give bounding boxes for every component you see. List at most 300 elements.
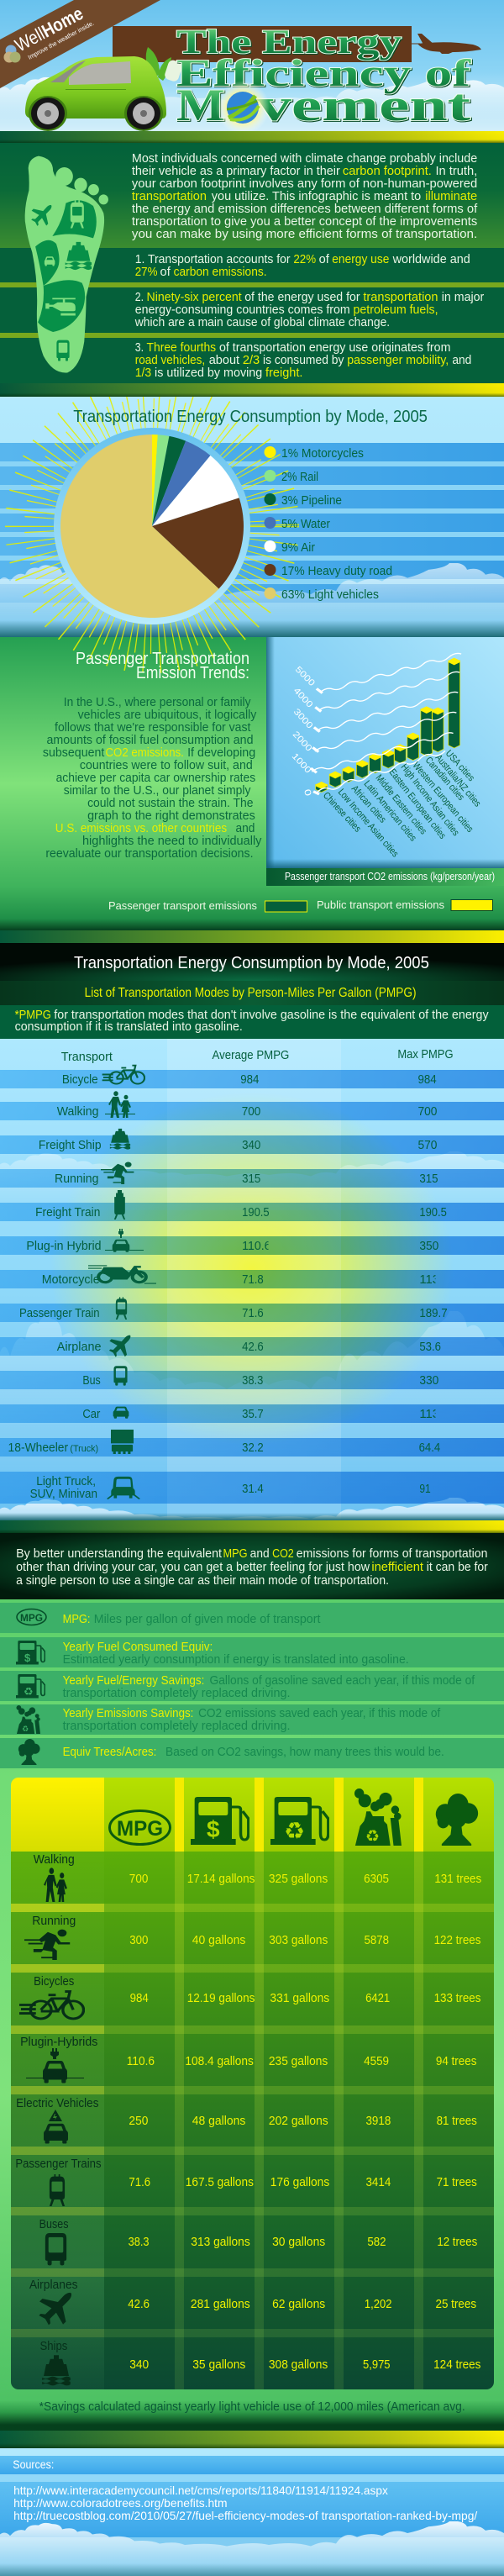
title: The Energy Efficiency of Movement: vement	[257, 80, 470, 130]
table row labels: Passenger Trains	[15, 2157, 102, 2171]
legend item: yearly fuel savings: Yearly Fuel/Energy Savings:	[63, 1674, 204, 1688]
legend item: equiv trees	[63, 1746, 444, 1759]
row: light truck SUV minivan: SUV, Minivan	[30, 1488, 97, 1501]
text block: emission trends paragraph: follows that we're responsible for vast	[55, 721, 250, 735]
text block: intro paragraph	[132, 152, 479, 241]
illustration: footprint with transport icons	[25, 156, 108, 372]
table row labels: Airplanes	[29, 2278, 78, 2292]
text block: emission trends paragraph: vehicles are ubiquitous, it logically	[78, 709, 257, 722]
values: electric vehicles: 81 trees	[437, 2115, 477, 2128]
text block: intro paragraph: your carbon footprint involves any form of non-human-powered	[132, 177, 477, 191]
text block: fact 1: carbon emissions.	[174, 266, 267, 279]
values: bicycles: 133 trees	[434, 1992, 481, 2005]
text block: fact 3: is utilized by moving	[155, 366, 262, 380]
legend item: yearly emissions savings	[63, 1707, 441, 1733]
panel: lower green background	[0, 1599, 504, 2425]
title brown backing bar	[113, 26, 412, 62]
values: running: 5878	[365, 1934, 389, 1947]
row: motorcycle	[42, 1274, 435, 1286]
row: freight train	[35, 1206, 447, 1220]
values: running	[129, 1934, 481, 1947]
values: passenger trains: 167.5 gallons	[186, 2176, 255, 2189]
values: plugin hybrids	[127, 2055, 477, 2068]
legend item: yearly fuel savings: transportation completely replaced driving.	[63, 1687, 291, 1700]
chart city labels: USA cities	[444, 749, 476, 783]
text block: fact 2: 2.	[135, 291, 144, 304]
row: 18-wheeler: (Truck)	[70, 1442, 98, 1454]
values: walking: 131 trees	[434, 1873, 482, 1886]
values: plugin hybrids: 110.6	[127, 2055, 155, 2068]
text block: sources: Sources:	[13, 2458, 54, 2472]
icon: MPG badge: MPG	[117, 1817, 163, 1841]
values: ships: 124 trees	[433, 2358, 481, 2372]
text block: fact 1: 1. Transportation accounts for	[135, 253, 291, 266]
table row labels: Bicycles	[34, 1975, 75, 1989]
values: ships: 35 gallons	[192, 2358, 246, 2372]
text block: fact 3: passenger mobility,	[347, 354, 449, 367]
heading: consumption table title: Transportation Energy Consumption by Mode, 2005	[74, 954, 429, 972]
legend: pie chart modes: 3% Pipeline	[281, 494, 342, 508]
values: bicycles: 331 gallons	[270, 1992, 330, 2005]
row: airplane: 42.6	[242, 1341, 264, 1354]
row: bicycle: 984	[240, 1073, 259, 1087]
text block: fact 1: 27%	[135, 266, 158, 279]
row: passenger train	[19, 1307, 448, 1320]
chart city labels: Eastern European cities	[386, 767, 448, 841]
heading: passenger transportation emission trends: Emission Trends:	[136, 664, 249, 682]
values: bicycles	[130, 1992, 481, 2005]
legend item: yearly fuel consumed	[63, 1641, 409, 1667]
values: airplanes	[128, 2298, 477, 2311]
row: bus	[82, 1374, 438, 1388]
text block: emission trends paragraph: amounts of fossil fuel consumption and	[46, 734, 254, 747]
band: divider above dark section	[0, 930, 504, 943]
section: header sky	[0, 0, 504, 134]
text block: emission trends paragraph: similar to the U.S., our planet simply	[64, 784, 251, 798]
icon: tree	[436, 1794, 478, 1846]
row: freight ship: 570	[417, 1139, 437, 1152]
row: walking	[57, 1105, 437, 1119]
table row labels: Electric Vehicles	[16, 2097, 99, 2110]
text block: fact 3: 1/3	[135, 366, 151, 380]
icon: fuel pump dollar small: $	[24, 1651, 31, 1664]
row: light truck SUV minivan	[30, 1475, 431, 1501]
text block: explanation paragraph: other than driving your car, you can get a better feeling for just how	[16, 1561, 370, 1574]
panel: dark explanation block	[0, 1533, 504, 1599]
chart city labels: Canadian cities	[423, 756, 466, 803]
row: motorcycle: 71.8	[242, 1273, 264, 1287]
text block: sources: http://www.coloradotrees.org/benefits.htm	[13, 2497, 228, 2510]
table header row	[61, 1048, 454, 1064]
text block: emission trends paragraph: achieve per capita car ownership rates	[56, 772, 256, 785]
chart axis labels: 0	[302, 788, 313, 798]
row: running: 315	[242, 1172, 260, 1186]
legend item: yearly emissions savings: Yearly Emissions Savings:	[63, 1707, 193, 1720]
legend: pie chart modes: 17% Heavy duty road	[281, 565, 392, 578]
text block: sources	[13, 2458, 477, 2523]
legend: pie chart modes: 9% Air	[281, 541, 315, 555]
row: bicycle: Bicycle	[62, 1073, 98, 1087]
row: light truck SUV minivan: 31.4	[242, 1483, 264, 1496]
values: electric vehicles: 3918	[365, 2115, 391, 2128]
text block: emission trends paragraph: If developing	[187, 746, 255, 760]
legend item: equiv trees: Based on CO2 savings, how many trees this would be.	[165, 1746, 444, 1759]
text block: intro paragraph: carbon footprint.	[343, 165, 432, 178]
text block: intro paragraph: Most individuals concerned with climate change probably include	[132, 152, 477, 166]
panel: consumption table heading	[0, 943, 504, 1039]
row: car: 35.7	[242, 1408, 264, 1421]
values: running: 303 gallons	[269, 1934, 328, 1947]
row: car: Car	[82, 1408, 101, 1421]
text block: fact 1	[135, 253, 470, 279]
text block: emission trends paragraph	[43, 696, 262, 861]
values: buses	[129, 2236, 478, 2249]
text block: intro paragraph: In truth,	[435, 165, 477, 178]
values: electric vehicles: 250	[129, 2115, 148, 2128]
text block: fact 3: of transportation energy use originates from	[219, 341, 450, 355]
text block: intro paragraph: you can make by using more efficient forms of transportation.	[132, 228, 477, 241]
table header row: Average PMPG	[213, 1049, 289, 1062]
values: buses: 38.3	[129, 2236, 150, 2249]
legend: pie chart modes	[264, 446, 392, 602]
heading: pie chart title: Transportation Energy Consumption by Mode, 2005	[73, 408, 428, 426]
values: ships	[129, 2358, 481, 2372]
text block: fact 2: which are a main cause of global climate change.	[134, 316, 390, 329]
text block: fact 2: of the energy used for	[244, 291, 360, 304]
text block: emission trends paragraph: subsequent	[43, 746, 104, 760]
text block: intro paragraph: illuminate	[425, 190, 477, 203]
text block: PMPG note: for transportation modes that don't involve gasoline is the equivalent of the energy	[54, 1009, 489, 1022]
text block: fact 3: road vehicles,	[135, 354, 205, 367]
icon: fuel pump dollar	[191, 1797, 249, 1845]
row: plug-in hybrid	[26, 1240, 438, 1253]
chart city labels: Chinese cities	[321, 791, 363, 835]
chart city labels: African cities	[349, 784, 388, 825]
panel: passenger transportation green background	[0, 637, 504, 930]
heading: passenger transportation emission trends	[76, 650, 249, 682]
text block: fact 3: and	[452, 354, 471, 367]
chart legend: Passenger transport emissions	[108, 899, 257, 912]
subheading: list of modes: List of Transportation Modes by Person-Miles Per Gallon (PMPG)	[85, 986, 417, 1000]
legend item: yearly fuel savings	[63, 1674, 475, 1700]
values: airplanes: 281 gallons	[191, 2298, 250, 2311]
values: walking	[129, 1873, 482, 1886]
banner: WellHome logo strap: Improve the weather inside.	[27, 19, 95, 61]
row: running: 315	[419, 1172, 438, 1186]
text block: fact 3: 3.	[135, 341, 144, 355]
chart city labels: Western European cities	[411, 761, 475, 835]
row: plug-in hybrid: Plug-in Hybrid	[26, 1240, 102, 1253]
values: plugin hybrids: 235 gallons	[269, 2055, 328, 2068]
text block: PMPG note: *PMPG	[15, 1009, 51, 1022]
row: passenger train: 189.7	[419, 1307, 448, 1320]
title: The Energy Efficiency of Movement	[176, 23, 471, 130]
values: airplanes: 42.6	[128, 2298, 150, 2311]
band: divider above legend	[0, 1520, 504, 1533]
text block: explanation paragraph: emissions for forms of transportation	[297, 1547, 487, 1561]
legend item: MPG: Miles per gallon of given mode of transport	[94, 1613, 321, 1626]
row: freight ship	[39, 1139, 437, 1152]
legend icons	[16, 1609, 46, 1765]
text block: fact 2: energy-consuming countries comes from	[135, 303, 350, 317]
row: freight ship: Freight Ship	[39, 1139, 102, 1152]
values: walking: 700	[129, 1873, 148, 1886]
text block: sources: http://www.interacademycouncil.net/cms/reports/11840/11914/11924.aspx	[13, 2484, 389, 2498]
text block: emission trends paragraph: U.S. emissions vs. other countries	[55, 822, 228, 835]
text block: emission trends paragraph: countries were to follow suit, and	[80, 759, 253, 772]
row: passenger train: Passenger Train	[19, 1307, 100, 1320]
values: airplanes: 62 gallons	[272, 2298, 326, 2311]
legend item: yearly emissions savings: transportation completely replaced driving.	[63, 1720, 291, 1733]
icon: tree small	[18, 1739, 40, 1765]
text block: intro paragraph: the energy and emission differences between different forms of	[132, 203, 479, 216]
row: bicycle	[62, 1073, 437, 1087]
text block: emission trends paragraph: highlights the need to individually	[82, 835, 262, 848]
legend item: yearly emissions savings: CO2 emissions saved each year, if this mode of	[198, 1707, 441, 1720]
text block: emission trends paragraph: In the U.S., where personal or family	[64, 696, 251, 709]
values: walking: 17.14 gallons	[187, 1873, 255, 1886]
chart legend: Public transport emissions	[317, 898, 444, 911]
values: bicycles: 984	[130, 1992, 149, 2005]
values: passenger trains	[129, 2176, 477, 2189]
row: plug-in hybrid: 350	[419, 1240, 438, 1253]
table header row: Transport	[61, 1051, 113, 1064]
text block: fact 3: 2/3	[243, 354, 260, 367]
icon: globe with green swirl	[216, 81, 270, 134]
table values	[127, 1873, 482, 2372]
values: ships: 308 gallons	[269, 2358, 328, 2372]
text block: fact 2: Ninety-six percent	[146, 291, 242, 304]
values: buses: 12 trees	[437, 2236, 478, 2249]
footnote: savings calculation: *Savings calculated against yearly light vehicle use of 12,000 miles (American avg.	[39, 2400, 465, 2414]
text block: fact 3: freight.	[265, 366, 302, 380]
row: walking: Walking	[57, 1105, 98, 1119]
row: freight train: 190.5	[419, 1206, 447, 1220]
values: bicycles: 12.19 gallons	[187, 1992, 255, 2005]
icon: factory: ♻	[365, 1827, 380, 1846]
text block: emission trends paragraph: graph to the right demonstrates	[87, 809, 255, 823]
icons: PMPG table transport modes	[88, 1066, 156, 1499]
text block: fact 2: transportation	[363, 291, 438, 304]
row: plug-in hybrid: 110.6	[242, 1240, 271, 1253]
icon: factory small	[16, 1705, 40, 1734]
values: running: 300	[129, 1934, 148, 1947]
row: freight ship: 340	[242, 1139, 260, 1152]
table row labels: Running	[32, 1915, 76, 1928]
text block: fact 3: about	[209, 354, 239, 367]
values: plugin hybrids: 108.4 gallons	[185, 2055, 255, 2068]
chart legend	[108, 898, 492, 912]
row: running	[55, 1172, 438, 1186]
icon: fuel pump dollar: $	[207, 1816, 220, 1842]
chart axis labels: 5000	[293, 665, 317, 688]
text block: explanation paragraph: a single person to use a single car as their main mode of transportation.	[16, 1574, 389, 1588]
icon: MPG badge small: MPG	[20, 1612, 43, 1624]
table row labels: Plugin-Hybrids	[20, 2036, 98, 2049]
panel: pie chart background with stripes and clouds	[0, 397, 504, 637]
illustration: green car	[25, 47, 183, 131]
values: plugin hybrids: 4559	[364, 2055, 389, 2068]
values: electric vehicles: 202 gallons	[269, 2115, 328, 2128]
text block: intro paragraph: transportation	[132, 190, 207, 203]
table row icons	[19, 1867, 84, 2385]
text block: explanation paragraph: By better understanding the equivalent	[16, 1547, 222, 1561]
values: ships: 5,975	[363, 2358, 391, 2372]
text block: sources: http://truecostblog.com/2010/05/27/fuel-efficiency-modes-of transportation-ranked-by-mpg/	[13, 2510, 477, 2523]
table: savings comparison	[11, 1778, 494, 2389]
text block: PMPG note: consumption if it is translated into gasoline.	[15, 1020, 243, 1034]
legend: pie chart modes: 1% Motorcycles	[281, 447, 364, 461]
row: running: Running	[55, 1172, 98, 1186]
legend stripes	[0, 1603, 504, 1768]
chart city labels	[321, 749, 482, 859]
values: passenger trains: 71 trees	[437, 2176, 477, 2189]
text block: fact 1: worldwide and	[391, 253, 470, 266]
values: plugin hybrids: 94 trees	[436, 2055, 477, 2068]
values: passenger trains: 71.6	[129, 2176, 150, 2189]
text block: explanation paragraph: CO2	[272, 1547, 294, 1561]
values: buses: 582	[367, 2236, 386, 2249]
decoration: sun rays behind pie	[29, 403, 275, 649]
table row labels: Buses	[39, 2218, 69, 2231]
title: The Energy Efficiency of Movement: M	[176, 80, 225, 130]
row: bus: Bus	[82, 1374, 101, 1388]
icon: fuel pump recycle	[270, 1797, 328, 1845]
text block: explanation paragraph: MPG	[223, 1547, 248, 1561]
legend item: yearly fuel consumed: Yearly Fuel Consumed Equiv:	[63, 1641, 213, 1654]
values: electric vehicles: 48 gallons	[192, 2115, 246, 2128]
text block: fact 2: in major	[442, 291, 485, 304]
icon: MPG badge	[109, 1810, 170, 1844]
text block: fact 3	[135, 341, 471, 380]
title: The Energy Efficiency of Movement: The Energy	[176, 23, 402, 61]
text block: emission trends paragraph: and	[235, 822, 255, 835]
values: buses: 313 gallons	[191, 2236, 250, 2249]
text block: fact 3: Three fourths	[146, 341, 217, 355]
icon: fuel pump recycle: ♻	[284, 1817, 305, 1845]
chart city labels: Australia/NZ cities	[433, 753, 482, 809]
row: bus: 330	[419, 1374, 438, 1388]
banner: WellHome logo strap	[0, 0, 160, 88]
text block: fact 1: 22%	[293, 253, 316, 266]
panel: sources background	[0, 2448, 504, 2576]
text block: fact 1: of	[160, 266, 171, 279]
icon: fuel pump recycle small: ♻	[24, 1686, 34, 1699]
text block: intro paragraph: transportation to give you a better concept of the improvements	[132, 215, 478, 229]
values: airplanes: 1,202	[365, 2298, 391, 2311]
values: walking: 6305	[364, 1873, 389, 1886]
row: car: 113	[419, 1408, 439, 1421]
title: The Energy Efficiency of Movement: Efficiency of	[176, 51, 471, 94]
legend: pie chart modes: 5% Water	[281, 518, 330, 531]
icon: fuel pump recycle small	[16, 1674, 45, 1699]
values: buses: 30 gallons	[272, 2236, 326, 2249]
text block: intro paragraph: their vehicle as a primary factor in their	[132, 165, 340, 178]
table row labels	[15, 1853, 102, 2353]
text block: emission trends paragraph: reevaluate our transportation decisions.	[45, 847, 254, 861]
values: ships: 340	[129, 2358, 149, 2372]
legend item: equiv trees: Equiv Trees/Acres:	[63, 1746, 156, 1759]
values: electric vehicles	[129, 2115, 477, 2128]
table row labels: Walking	[34, 1853, 75, 1867]
legend: pie chart modes: 63% Light vehicles	[281, 588, 379, 602]
panel: chart background	[266, 637, 504, 886]
row: 18-wheeler: 18-Wheeler	[8, 1441, 69, 1455]
values: bicycles: 6421	[365, 1992, 390, 2005]
legend: pie chart modes: 2% Rail	[281, 471, 318, 484]
text block: explanation paragraph	[16, 1547, 488, 1588]
icon: airplane silhouette	[412, 34, 481, 54]
row: airplane: Airplane	[57, 1341, 102, 1354]
row: passenger train: 71.6	[242, 1307, 264, 1320]
text block: explanation paragraph: inefficient	[371, 1561, 423, 1574]
icon: MPG badge small	[17, 1609, 46, 1625]
text block: PMPG note	[15, 1009, 489, 1034]
table background and grid	[11, 1778, 494, 2389]
legend item: yearly fuel consumed: Estimated yearly consumption if energy is translated into gasoline.	[63, 1653, 409, 1667]
text block: fact 2: petroleum fuels,	[354, 303, 438, 317]
text block: emission trends paragraph: CO2 emissions.	[106, 746, 184, 760]
icon: fuel pump dollar small	[16, 1641, 45, 1664]
table: PMPG values	[8, 1048, 454, 1501]
title: The Energy Efficiency of Movement: o	[228, 80, 255, 130]
chart: 3D bars of CO2 emissions by city	[311, 653, 461, 794]
row: 18-wheeler	[8, 1441, 440, 1455]
legend item: MPG	[63, 1613, 321, 1626]
chart axis labels: 3000	[291, 707, 315, 731]
legend: icon key text	[63, 1613, 475, 1759]
row: light truck SUV minivan: Light Truck,	[36, 1475, 96, 1488]
row: light truck SUV minivan: 91	[419, 1483, 431, 1496]
row: airplane	[57, 1341, 441, 1354]
heading: passenger transportation emission trends: Passenger Transportation	[76, 650, 249, 668]
chart city labels: High Income Asian cities	[398, 762, 461, 838]
pie chart: transportation energy consumption	[54, 428, 250, 624]
row: freight train: Freight Train	[35, 1206, 100, 1220]
table row labels: Ships	[39, 2340, 68, 2353]
banner: WellHome logo strap: WellHome	[12, 3, 87, 55]
chart city labels: Low Income Asian cities	[336, 788, 400, 859]
table header row: Max PMPG	[397, 1048, 454, 1061]
icon: factory small: ♻	[22, 1725, 29, 1734]
panel: PMPG table background	[0, 1039, 504, 1548]
chart axis labels: 2000	[291, 730, 314, 754]
text block: fact 1: of	[319, 253, 330, 266]
row: airplane: 53.6	[419, 1341, 441, 1354]
text block: emission trends paragraph: could not sustain the strain. The	[87, 797, 254, 810]
row: car	[83, 1409, 435, 1418]
chart axis labels: 4000	[291, 686, 315, 710]
values: walking: 325 gallons	[269, 1873, 328, 1886]
text block: intro paragraph: you utilize. This infographic is meant to	[212, 190, 421, 203]
legend item: MPG: MPG:	[63, 1613, 91, 1626]
row: 18-wheeler: 64.4	[419, 1441, 440, 1455]
text block: explanation paragraph: it can be for	[427, 1561, 488, 1574]
values: running: 40 gallons	[192, 1934, 246, 1947]
legend item: yearly fuel savings: Gallons of gasoline saved each year, if this mode of	[209, 1674, 475, 1688]
values: passenger trains: 176 gallons	[270, 2176, 330, 2189]
row: walking: 700	[242, 1105, 260, 1119]
chart city labels: Latin American cities	[362, 779, 418, 844]
values: passenger trains: 3414	[365, 2176, 391, 2189]
row: bus: 38.3	[242, 1374, 263, 1388]
chart axis labels: 1000	[290, 751, 313, 776]
icon: factory	[354, 1788, 402, 1846]
table header icons	[109, 1788, 478, 1846]
text block: fact 1: energy use	[332, 253, 389, 266]
row: motorcycle: Motorcycle	[42, 1273, 100, 1287]
row: 18-wheeler: 32.2	[242, 1441, 264, 1455]
